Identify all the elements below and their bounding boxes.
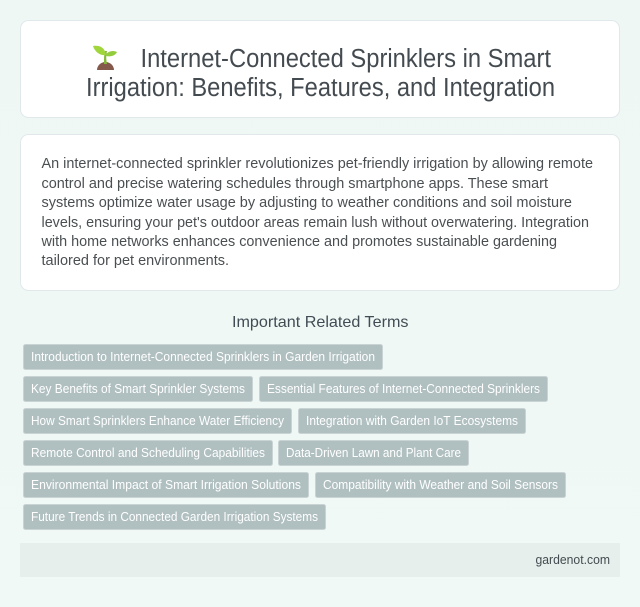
icon: seedling	[93, 46, 117, 70]
tag	[278, 440, 468, 466]
tag: Compatibility with Weather and Soil Sensors	[323, 477, 558, 492]
panel: related term tags	[24, 344, 566, 530]
tag: Future Trends in Connected Garden Irrigation Systems	[31, 509, 318, 524]
tag	[298, 408, 526, 434]
panel: description card	[20, 134, 620, 290]
footer source text: gardenot.com	[536, 552, 610, 567]
tag: Data-Driven Lawn and Plant Care	[286, 445, 461, 460]
description text: control and precise watering schedules through smartphone apps. These smart	[42, 176, 548, 192]
tag	[316, 472, 566, 498]
tag	[24, 376, 252, 402]
description text: An internet-connected sprinkler revolutionizes pet-friendly irrigation by allowing remote	[42, 156, 593, 172]
tag	[24, 472, 308, 498]
tag	[24, 440, 272, 466]
description text: systems optimize water usage by adjusting to weather conditions and soil moisture	[42, 195, 572, 211]
description text: levels, ensuring your pet's outdoor areas remain lush without overwatering. Integration	[42, 215, 589, 231]
tag: Remote Control and Scheduling Capabilities	[31, 445, 265, 460]
title line 1: Internet-Connected Sprinklers in Smart	[140, 45, 551, 73]
tag	[24, 408, 292, 434]
tag: Environmental Impact of Smart Irrigation Solutions	[31, 477, 301, 492]
panel: title card	[20, 20, 620, 118]
tag: Essential Features of Internet-Connected Sprinklers	[267, 381, 540, 396]
heading: important related terms: Important Related Terms	[232, 314, 408, 331]
tag	[260, 376, 548, 402]
tag	[24, 504, 326, 530]
tag	[24, 344, 382, 370]
tag: Integration with Garden IoT Ecosystems	[306, 413, 518, 428]
tag: Key Benefits of Smart Sprinkler Systems	[31, 381, 245, 396]
tag: How Smart Sprinklers Enhance Water Efficiency	[31, 413, 285, 428]
title line 2: Irrigation: Benefits, Features, and Integration	[86, 74, 555, 102]
description text: with home networks enhances convenience and promotes sustainable gardening	[41, 234, 557, 250]
description text	[41, 156, 593, 269]
tag: Introduction to Internet-Connected Sprinklers in Garden Irrigation	[31, 349, 375, 364]
description text: tailored for pet environments.	[42, 253, 229, 269]
footer bar	[20, 543, 620, 577]
